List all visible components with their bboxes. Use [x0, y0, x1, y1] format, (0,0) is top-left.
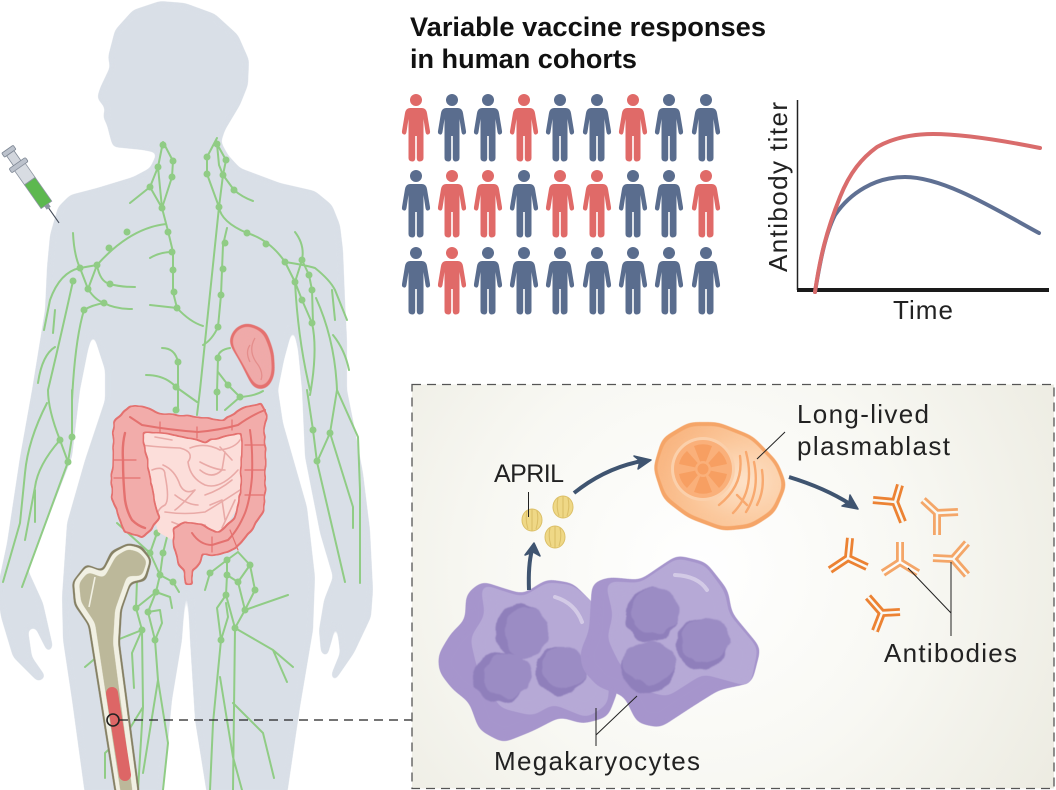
row 3	[402, 247, 720, 314]
title	[410, 12, 766, 74]
high responder curve	[815, 134, 1040, 292]
human body silhouette	[0, 1, 373, 790]
bone marrow	[112, 693, 125, 775]
spleen	[228, 322, 275, 390]
femur bone	[72, 543, 152, 790]
antibody 2	[923, 500, 958, 535]
callout line from bone marrow to panel	[107, 714, 412, 726]
panel: bone marrow niche	[412, 384, 1054, 788]
axes	[796, 100, 798, 290]
low responder curve	[815, 177, 1039, 292]
lymphatic system	[3, 138, 360, 790]
nucleus	[671, 437, 735, 501]
endoplasmic reticulum	[719, 452, 763, 513]
megakaryocyte cell left	[438, 579, 619, 743]
long-lived plasmablast cell	[653, 422, 787, 531]
arrow: plasmablast to antibodies	[789, 477, 858, 509]
antibody 3	[830, 538, 867, 570]
arrow: megakaryocyte to APRIL	[525, 543, 540, 590]
arrow: APRIL to plasmablast	[574, 456, 651, 493]
title: Variable vaccine responses	[410, 12, 766, 42]
antibodies label: Antibodies	[884, 638, 1017, 668]
antibody titer line chart	[763, 100, 1049, 325]
small intestine	[140, 430, 245, 540]
colon	[111, 403, 268, 585]
megakaryocyte cell right	[580, 555, 761, 728]
antibody 5	[933, 543, 967, 575]
APRIL label	[494, 460, 564, 517]
megakaryocytes label	[494, 696, 700, 776]
plasmablast label	[757, 399, 951, 461]
lymph vessels	[3, 138, 360, 790]
row 1	[402, 94, 720, 162]
antibody 1	[873, 485, 903, 522]
icon: syringe	[0, 143, 67, 229]
row 2	[402, 170, 720, 238]
x axis label: Time	[893, 295, 953, 325]
APRIL label: APRIL	[494, 460, 564, 488]
y axis label: Antibody titer	[763, 102, 793, 272]
megakaryocytes label: Megakaryocytes	[494, 746, 700, 776]
colon folds	[114, 410, 265, 552]
lymph nodes	[56, 140, 334, 644]
plasmablast label: Long-lived	[797, 399, 929, 429]
antibody 6	[868, 597, 900, 631]
antibodies label	[884, 562, 1017, 668]
APRIL particles	[522, 496, 573, 548]
title: in human cohorts	[410, 44, 637, 74]
antibodies	[830, 485, 967, 631]
antibody 4	[883, 542, 918, 573]
plasmablast label: plasmablast	[797, 431, 951, 461]
human cohort: people icons	[402, 94, 720, 314]
